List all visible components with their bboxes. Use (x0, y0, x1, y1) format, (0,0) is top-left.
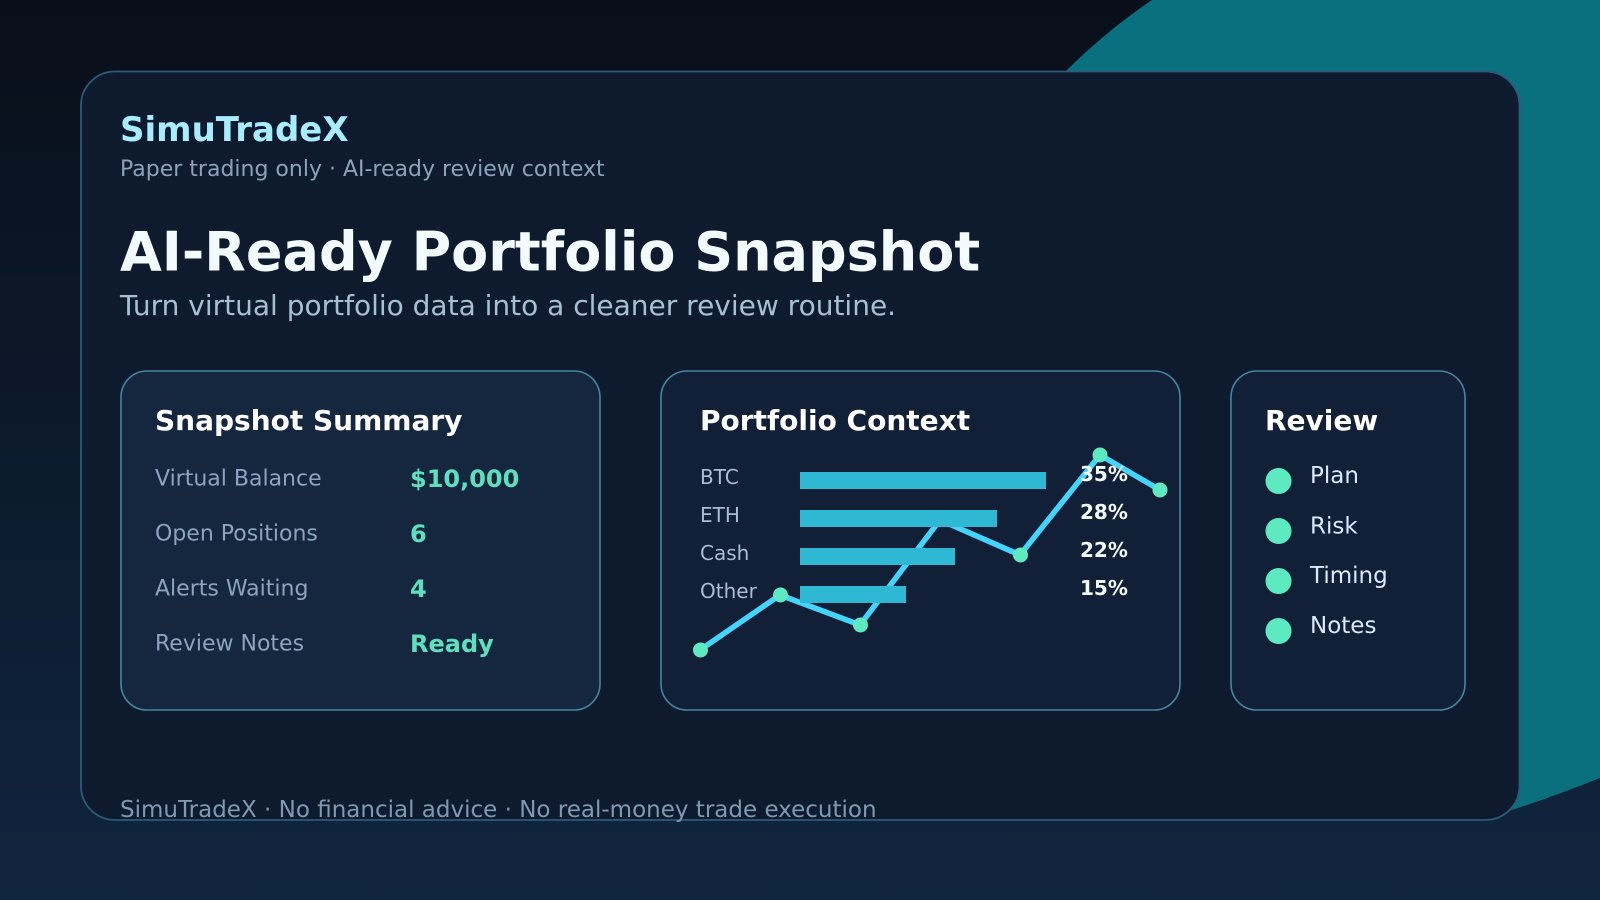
row: open positions: Open Positions (155, 522, 318, 546)
row: virtual balance: $10,000 (410, 465, 519, 493)
subtitle: Turn virtual portfolio data into a cleaner review routine. (119, 289, 896, 322)
row: review notes: Ready (410, 630, 494, 658)
line chart (693, 448, 1168, 658)
brand name: SimuTradeX (120, 110, 349, 150)
panel: snapshot summary (121, 371, 600, 710)
bar row: Other: 15% (1080, 576, 1128, 600)
item: notes: Notes (1310, 613, 1376, 639)
brand tagline: Paper trading only · AI-ready review context (120, 157, 605, 182)
heading: review: Review (1265, 404, 1378, 437)
bar row: ETH: ETH (700, 503, 740, 527)
row: review notes (155, 630, 494, 658)
bar row: BTC: 35% (1080, 462, 1128, 486)
row: alerts waiting: 4 (410, 575, 427, 603)
bar row: BTC (700, 462, 1128, 489)
item: timing (1266, 563, 1388, 594)
item: risk: Risk (1310, 514, 1358, 540)
panel: portfolio context (661, 371, 1180, 710)
item: plan (1266, 463, 1359, 494)
item: risk (1266, 514, 1358, 544)
teal background shape (1065, 0, 1600, 820)
bar row: ETH: 28% (1080, 500, 1128, 524)
main panel (81, 72, 1520, 820)
row: open positions: 6 (410, 520, 427, 548)
row: virtual balance (155, 465, 519, 493)
row: open positions (155, 520, 427, 548)
bar row: BTC: BTC (700, 465, 739, 489)
item: timing: Timing (1309, 563, 1388, 589)
panel: review (1231, 371, 1465, 710)
heading: snapshot summary: Snapshot Summary (155, 404, 462, 437)
item: notes (1266, 613, 1376, 644)
row: alerts waiting (155, 575, 427, 603)
row: virtual balance: Virtual Balance (155, 466, 322, 492)
heading: portfolio context: Portfolio Context (700, 404, 970, 437)
bar row: Other: Other (700, 579, 758, 603)
row: review notes: Review Notes (155, 632, 304, 656)
bar row: Cash: 22% (1080, 538, 1128, 562)
row: alerts waiting: Alerts Waiting (155, 576, 308, 602)
footer note: SimuTradeX · No financial advice · No real-money trade execution (120, 797, 877, 823)
bar row: ETH (700, 500, 1128, 527)
title: AI-Ready Portfolio Snapshot (120, 220, 980, 284)
bar row: Cash (700, 538, 1128, 565)
item: plan: Plan (1310, 463, 1359, 489)
bar row: Other (700, 576, 1128, 603)
bar row: Cash: Cash (700, 541, 749, 565)
